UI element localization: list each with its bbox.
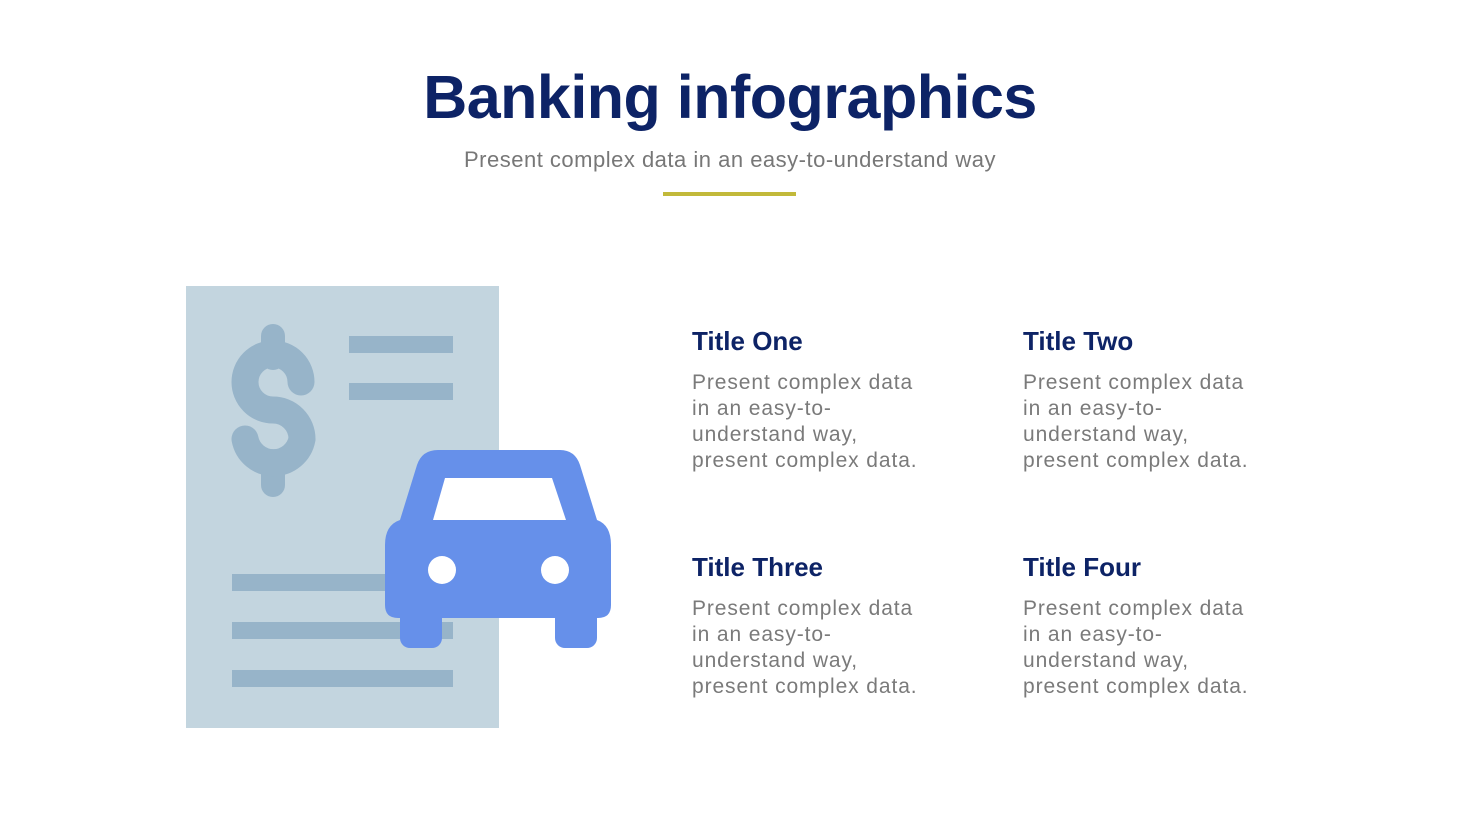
- item: Title One: Present complex data: [692, 371, 913, 394]
- item: Title Two: [1023, 326, 1249, 472]
- item: Title Two: present complex data.: [1023, 449, 1249, 472]
- icon: car: [385, 450, 611, 648]
- item: Title One: understand way,: [692, 423, 858, 446]
- item: Title Two: understand way,: [1023, 423, 1189, 446]
- title: Banking infographics: [423, 63, 1037, 131]
- item: Title One: Title One: [692, 326, 803, 356]
- item: Title Four: Present complex data: [1023, 597, 1244, 620]
- item: Title Three: in an easy-to-: [692, 623, 832, 646]
- item: Title Two: in an easy-to-: [1023, 397, 1163, 420]
- item: Title Four: present complex data.: [1023, 675, 1249, 698]
- item: Title Three: present complex data.: [692, 675, 918, 698]
- accent underline: [663, 192, 796, 196]
- item: Title Four: in an easy-to-: [1023, 623, 1163, 646]
- item: Title One: in an easy-to-: [692, 397, 832, 420]
- item: Title One: [692, 326, 918, 472]
- item: Title One: present complex data.: [692, 449, 918, 472]
- document: [186, 286, 499, 728]
- item: Title Two: Title Two: [1023, 326, 1133, 356]
- item: Title Two: Present complex data: [1023, 371, 1244, 394]
- icon: dollar sign: [245, 336, 302, 485]
- item: Title Three: [692, 552, 918, 698]
- item: Title Three: Title Three: [692, 552, 823, 582]
- subtitle: Present complex data in an easy-to-understand way: [464, 147, 996, 172]
- item: Title Four: [1023, 552, 1249, 698]
- item: Title Three: Present complex data: [692, 597, 913, 620]
- item: Title Four: understand way,: [1023, 649, 1189, 672]
- item: Title Three: understand way,: [692, 649, 858, 672]
- item: Title Four: Title Four: [1023, 552, 1141, 582]
